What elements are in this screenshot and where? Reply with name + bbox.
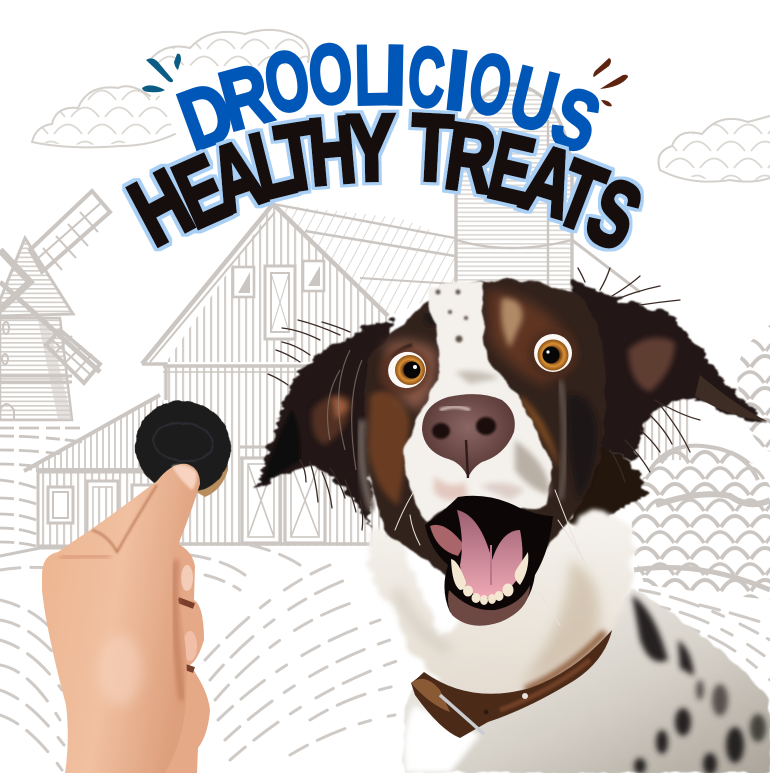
fingers [165,540,210,773]
dog head base [361,280,606,590]
open mouth [425,496,553,626]
title: HEALTHY TREATS: E [480,113,543,224]
whiskers [395,490,590,625]
neck dark fur [560,440,648,530]
dog [258,268,770,773]
title: DROOLICIOUS: O [258,33,317,132]
title: HEALTHY TREATS: A [511,125,587,239]
title: HEALTHY TREATS: H [305,97,360,206]
title: HEALTHY TREATS [114,94,656,271]
title: DROOLICIOUS: O [463,35,518,134]
field strokes [0,545,770,770]
title: HEALTHY TREATS: Y [347,94,396,201]
title: DROOLICIOUS: O [305,27,356,124]
title: HEALTHY TREATS: S [572,158,656,271]
dark treat cookie [122,387,244,507]
title: DROOLICIOUS [168,27,612,171]
title: HEALTHY TREATS: T [543,140,617,253]
decorative burst: brown marks [593,58,628,106]
leather collar [411,630,612,738]
clouds [32,30,770,182]
left ear [258,320,392,530]
left eye [371,340,437,402]
title: HEALTHY TREATS: H [114,149,208,266]
white blaze and muzzle [403,282,553,520]
white neck ruff [367,510,633,696]
lower lip [448,585,530,626]
title: DROOLICIOUS: I [384,29,407,123]
title: HEALTHY TREATS: E [160,135,242,249]
title: DROOLICIOUS: D [168,64,245,169]
title: DROOLICIOUS: R [211,46,280,148]
title: HEALTHY TREATS: A [197,120,276,234]
small barn [0,395,165,556]
teeth [451,552,528,605]
nose [422,394,515,478]
title: HEALTHY TREATS: T [408,95,455,202]
title: DROOLICIOUS: I [441,33,473,129]
dog body [403,588,770,773]
windmill [0,191,110,420]
right ear [560,268,768,482]
title: HEALTHY TREATS: R [440,104,501,214]
title: DROOLICIOUS: S [540,68,612,171]
palm and thumb [42,464,200,773]
title: HEALTHY TREATS: T [270,103,325,213]
silo [456,84,640,292]
right eye [527,329,579,379]
hand holding treat [42,464,210,773]
title: DROOLICIOUS: U [501,48,567,150]
decorative burst: blue marks [142,54,181,92]
hill left [0,428,82,546]
title: DROOLICIOUS: L [354,29,389,123]
tongue [457,510,522,598]
title: DROOLICIOUS: C [406,29,447,125]
bushes [632,325,770,600]
title: HEALTHY TREATS: L [241,108,303,219]
main barn [142,204,692,546]
